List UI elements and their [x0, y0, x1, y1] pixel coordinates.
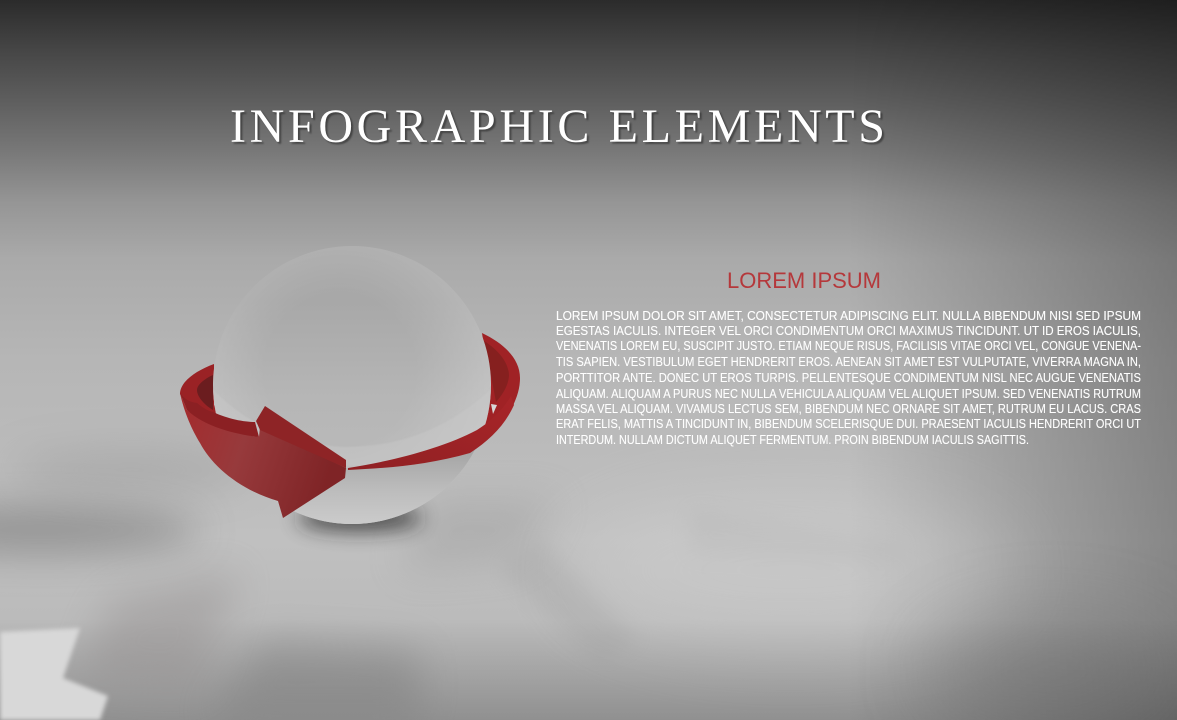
body text block [556, 309, 1141, 447]
heading: lorem ipsum: LOREM IPSUM [727, 268, 881, 293]
ring back, right [480, 333, 520, 430]
arrow head bevel [256, 406, 346, 468]
title: INFOGRAPHIC ELEMENTS [230, 100, 885, 153]
sphere with red arrow [180, 246, 520, 540]
gap highlight behind ring [491, 404, 497, 414]
arrow main face [180, 393, 346, 518]
body text block: EGESTAS IACULIS. INTEGER VEL ORCI CONDIMENTUM ORCI MAXIMUS TINCIDUNT. UT ID EROS IACULIS, [556, 324, 1141, 338]
sphere body [213, 246, 491, 524]
sphere contact shadow [298, 505, 422, 531]
body text block: LOREM IPSUM DOLOR SIT AMET, CONSECTETUR ADIPISCING ELIT. NULLA BIBENDUM NISI SED IPSUM [556, 309, 1141, 323]
body text block: INTERDUM. NULLAM DICTUM ALIQUET FERMENTUM. PROIN BIBENDUM IACULIS SAGITTIS. [556, 433, 1029, 447]
ring back, left [180, 364, 225, 430]
band reflection [213, 390, 491, 424]
title: INFOGRAPHIC ELEMENTS [232, 102, 887, 155]
arrow band top bevel [180, 393, 259, 437]
lower sphere below band [213, 390, 491, 524]
ring front right tail [348, 396, 514, 470]
